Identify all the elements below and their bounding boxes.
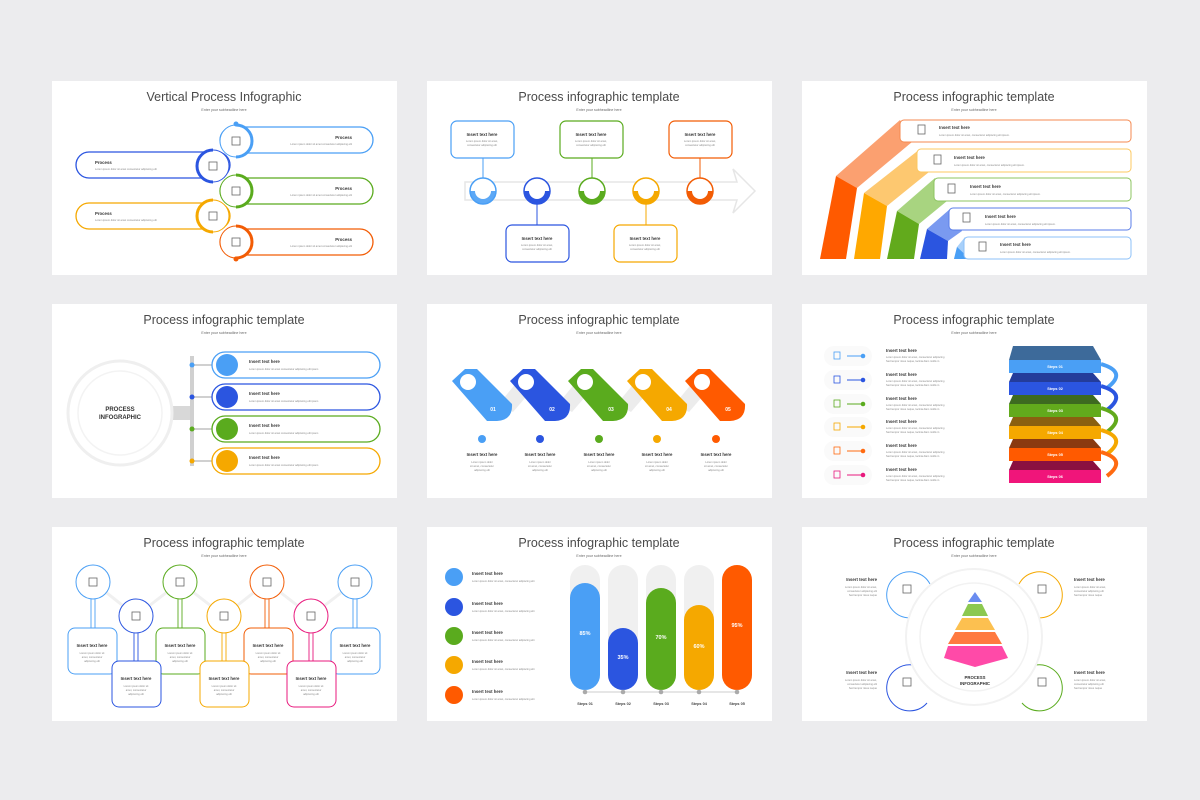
list text: Lorem ipsum dolor sit amet, consectetur adipiscing	[886, 403, 945, 407]
zigzag background	[93, 582, 355, 616]
bar chart: 95%	[731, 623, 743, 629]
center circle: PROCESS	[105, 407, 135, 413]
side texts: Insert text here	[846, 577, 878, 582]
box text: Insert text here	[165, 643, 196, 648]
step texts: adipiscing elit	[708, 468, 724, 472]
subtitle: Enter your subheadline here	[576, 554, 622, 558]
box text	[918, 125, 1071, 254]
step stack: Steps 03	[1047, 409, 1063, 413]
box text: Insert text here	[939, 125, 970, 130]
step texts: Lorem ipsum dolor	[471, 460, 493, 464]
title: Process infographic template	[143, 313, 305, 327]
panel: process tree	[52, 304, 397, 498]
list text: Insert text here	[886, 443, 917, 448]
box text: Lorem ipsum dolor sit amet,	[629, 243, 661, 247]
pyramid label	[960, 675, 990, 686]
step texts: Insert text here	[584, 452, 615, 457]
icon list: Insert text here	[472, 601, 503, 606]
box text: adipiscing elit	[260, 659, 276, 663]
box text: Lorem ipsum dolor sit amet,	[466, 139, 498, 143]
connectors	[483, 158, 700, 225]
list text: Sed tempor nisus neque, lacinia diam mollis in	[886, 359, 940, 363]
box text: Insert text here	[685, 132, 716, 137]
step texts: Lorem ipsum dolor	[529, 460, 551, 464]
center circle: INFOGRAPHIC	[99, 415, 142, 421]
box text: Lorem ipsum dolor sit	[80, 651, 105, 655]
bar chart	[570, 565, 752, 706]
side texts: consectetur adipiscing elit	[1074, 682, 1104, 686]
box text: amet, consectetur	[170, 655, 190, 659]
step texts: adipiscing elit	[532, 468, 548, 472]
box text: Insert text here	[296, 676, 327, 681]
center circle	[906, 569, 1042, 705]
box text: Lorem ipsum dolor sit	[168, 651, 193, 655]
side texts: consectetur adipiscing elit	[847, 682, 877, 686]
side texts: Lorem ipsum dolor sit amet,	[1074, 585, 1106, 589]
curved arrows	[1101, 364, 1116, 476]
step 1 right pill: Lorem ipsum dolor sit amet consectetur adipiscing elit	[290, 142, 352, 146]
box text: Lorem ipsum dolor sit	[212, 684, 237, 688]
step texts: Lorem ipsum dolor	[705, 460, 727, 464]
step text: Lorem ipsum dolor sit amet consectetur adipiscing elit ipsum	[249, 463, 318, 467]
bar chart: 60%	[693, 644, 705, 650]
box text: Insert text here	[340, 643, 371, 648]
box text: Lorem ipsum dolor sit amet,	[684, 139, 716, 143]
step texts: sit amet, consectetur	[645, 464, 669, 468]
step 3 right pill: Process	[335, 186, 353, 191]
box text: Insert text here	[253, 643, 284, 648]
step stack: Steps 04	[1047, 431, 1064, 435]
step texts: Lorem ipsum dolor	[646, 460, 668, 464]
step texts: Insert text here	[642, 452, 673, 457]
icon list: Lorem ipsum dolor sit amet, consectetur adipiscing elit	[472, 697, 535, 701]
box text: adipiscing elit	[172, 659, 188, 663]
icon list: Insert text here	[472, 659, 503, 664]
step texts: adipiscing elit	[591, 468, 607, 472]
tilted pills: 01	[490, 407, 496, 413]
step texts: sit amet, consectetur	[704, 464, 728, 468]
subtitle: Enter your subheadline here	[201, 331, 247, 335]
step 5 right pill: Process	[335, 237, 353, 242]
side texts: Sed tempor nisus neque	[1074, 593, 1103, 597]
box text: Lorem ipsum dolor sit	[124, 684, 149, 688]
subtitle: Enter your subheadline here	[951, 554, 997, 558]
list text: Insert text here	[886, 419, 917, 424]
icon list: Insert text here	[472, 630, 503, 635]
side texts: Insert text here	[846, 670, 878, 675]
list text: Sed tempor nisus neque, lacinia diam mollis in	[886, 430, 940, 434]
bar chart: Steps 03	[653, 702, 669, 706]
subtitle: Enter your subheadline here	[951, 108, 997, 112]
panel: process timeline arrow	[427, 81, 772, 275]
list text: Sed tempor nisus neque, lacinia diam mollis in	[886, 478, 940, 482]
boxes	[68, 628, 380, 707]
box text: Insert text here	[467, 132, 498, 137]
list text: Insert text here	[886, 348, 917, 353]
tilted pills: 05	[725, 407, 731, 413]
step stack: Steps 05	[1047, 453, 1063, 457]
step 3 right pill	[220, 178, 373, 204]
step text: Insert text here	[249, 423, 280, 428]
box text: amet, consectetur	[345, 655, 365, 659]
box text: Insert text here	[1000, 242, 1031, 247]
side texts: Insert text here	[1074, 670, 1105, 675]
step text	[249, 359, 318, 467]
side texts: Insert text here	[1074, 577, 1105, 582]
text boxes	[451, 121, 732, 262]
side texts: consectetur adipiscing elit	[1074, 589, 1104, 593]
tilted pills: 03	[608, 407, 614, 413]
subtitle: Enter your subheadline here	[576, 108, 622, 112]
step 2 left pill	[76, 152, 230, 178]
box text: Lorem ipsum dolor sit	[256, 651, 281, 655]
pyramid label: INFOGRAPHIC	[960, 681, 990, 686]
step texts: sit amet, consectetur	[528, 464, 552, 468]
side texts	[845, 577, 1106, 690]
step 2 left pill: Process	[95, 160, 112, 165]
box text: adipiscing elit	[128, 692, 144, 696]
box text: consectetur adipiscing elit	[522, 247, 552, 251]
box text: Lorem ipsum dolor sit amet,	[575, 139, 607, 143]
step stack	[1009, 346, 1101, 483]
step texts: Insert text here	[701, 452, 732, 457]
icon list: Insert text here	[472, 571, 503, 576]
subtitle: Enter your subheadline here	[951, 331, 997, 335]
list text	[886, 348, 945, 482]
side texts: Lorem ipsum dolor sit amet,	[1074, 678, 1106, 682]
box text: consectetur adipiscing elit	[467, 143, 497, 147]
list text: Insert text here	[886, 372, 917, 377]
box text	[77, 643, 371, 696]
box text: Lorem ipsum dolor sit	[343, 651, 368, 655]
panel: diagonal steps	[427, 304, 772, 498]
box text: Insert text here	[985, 214, 1016, 219]
side texts: Lorem ipsum dolor sit amet,	[845, 678, 877, 682]
box text: Lorem ipsum dolor sit amet,	[521, 243, 553, 247]
icon list	[445, 568, 535, 704]
step texts: Insert text here	[467, 452, 498, 457]
box text: Insert text here	[522, 236, 553, 241]
step 1 right pill: Process	[335, 135, 353, 140]
title: Process infographic template	[518, 90, 680, 104]
subtitle: Enter your subheadline here	[576, 331, 622, 335]
bar chart: 35%	[617, 655, 629, 661]
list text: Sed tempor nisus neque, lacinia diam mollis in	[886, 454, 940, 458]
step stack: Steps 02	[1047, 387, 1063, 391]
title: Process infographic template	[518, 313, 680, 327]
step text: Lorem ipsum dolor sit amet consectetur adipiscing elit ipsum	[249, 399, 318, 403]
icon list: Lorem ipsum dolor sit amet, consectetur adipiscing elit	[472, 579, 535, 583]
step text: Insert text here	[249, 455, 280, 460]
icon list	[824, 346, 872, 485]
box text: consectetur adipiscing elit	[576, 143, 606, 147]
box text: amet, consectetur	[258, 655, 278, 659]
box text: consectetur adipiscing elit	[630, 247, 660, 251]
connector	[170, 356, 212, 466]
box text: Lorem ipsum dolor sit amet, consectetur adipiscing elit ipsum.	[939, 133, 1010, 137]
title: Process infographic template	[893, 90, 1055, 104]
step texts: adipiscing elit	[649, 468, 665, 472]
circles	[76, 565, 372, 633]
step stack: Steps 01	[1047, 365, 1063, 369]
step icons	[216, 354, 238, 472]
bar chart: Steps 05	[729, 702, 745, 706]
panel: bar chart steps	[427, 527, 772, 721]
title: Process infographic template	[518, 536, 680, 550]
list text: Insert text here	[886, 396, 917, 401]
box text	[466, 132, 716, 251]
box text: Insert text here	[209, 676, 240, 681]
step texts: sit amet, consectetur	[587, 464, 611, 468]
box text: Insert text here	[954, 155, 985, 160]
step 4 left pill: Process	[95, 211, 112, 216]
list text: Lorem ipsum dolor sit amet, consectetur adipiscing	[886, 379, 945, 383]
step text: Insert text here	[249, 359, 280, 364]
step 3 right pill: Lorem ipsum dolor sit amet consectetur adipiscing elit	[290, 193, 352, 197]
tilted pills	[452, 369, 745, 421]
panel: circle and box chain	[52, 527, 397, 721]
step 4 left pill	[76, 203, 230, 229]
box text: Lorem ipsum dolor sit amet, consectetur adipiscing elit ipsum.	[985, 222, 1056, 226]
box text: Lorem ipsum dolor sit amet, consectetur adipiscing elit ipsum.	[970, 192, 1041, 196]
side texts: Sed tempor nisus neque	[849, 686, 878, 690]
box text: amet, consectetur	[126, 688, 146, 692]
title: Process infographic template	[893, 536, 1055, 550]
ribbons	[820, 120, 980, 259]
step 2 left pill: Lorem ipsum dolor sit amet consectetur adipiscing elit	[95, 167, 157, 171]
box text: Lorem ipsum dolor sit amet, consectetur adipiscing elit ipsum.	[954, 163, 1025, 167]
arrow band	[465, 169, 755, 213]
gray links	[499, 382, 708, 412]
title: Process infographic template	[893, 313, 1055, 327]
title: Vertical Process Infographic	[147, 90, 301, 104]
box text: consectetur adipiscing elit	[685, 143, 715, 147]
bar chart: 85%	[579, 631, 591, 637]
pyramid label: PROCESS	[964, 675, 986, 680]
box text: Insert text here	[630, 236, 661, 241]
center circle	[68, 361, 172, 465]
panel: stair ribbons	[802, 81, 1147, 275]
bar chart: Steps 04	[691, 702, 708, 706]
outer arcs	[887, 572, 1062, 711]
step 1 right pill	[220, 127, 373, 153]
step text: Lorem ipsum dolor sit amet consectetur adipiscing elit ipsum	[249, 431, 318, 435]
step text: Lorem ipsum dolor sit amet consectetur adipiscing elit ipsum	[249, 367, 318, 371]
box text: Insert text here	[77, 643, 108, 648]
step texts: sit amet, consectetur	[470, 464, 494, 468]
icon list: Lorem ipsum dolor sit amet, consectetur adipiscing elit	[472, 609, 535, 613]
box text: amet, consectetur	[82, 655, 102, 659]
bar chart: Steps 02	[615, 702, 631, 706]
list text: Lorem ipsum dolor sit amet, consectetur adipiscing	[886, 450, 945, 454]
list text: Insert text here	[886, 467, 917, 472]
step circles	[197, 122, 252, 262]
list text: Lorem ipsum dolor sit amet, consectetur adipiscing	[886, 426, 945, 430]
box text: Lorem ipsum dolor sit amet, consectetur adipiscing elit ipsum.	[1000, 250, 1071, 254]
bar chart: 70%	[655, 635, 667, 641]
subtitle: Enter your subheadline here	[201, 108, 247, 112]
list text: Sed tempor nisus neque, lacinia diam mollis in	[886, 383, 940, 387]
panel: vertical process	[52, 81, 397, 275]
side texts: consectetur adipiscing elit	[847, 589, 877, 593]
step texts: Insert text here	[525, 452, 556, 457]
step 5 right pill: Lorem ipsum dolor sit amet consectetur adipiscing elit	[290, 244, 352, 248]
title: Process infographic template	[143, 536, 305, 550]
box text: amet, consectetur	[301, 688, 321, 692]
step texts: adipiscing elit	[474, 468, 490, 472]
step text: Insert text here	[249, 391, 280, 396]
step texts	[467, 452, 732, 472]
tilted pills: 02	[549, 407, 555, 413]
pyramid	[944, 592, 1008, 667]
text boxes	[900, 120, 1131, 259]
step texts: Lorem ipsum dolor	[588, 460, 610, 464]
list text: Lorem ipsum dolor sit amet, consectetur adipiscing	[886, 355, 945, 359]
icons	[89, 578, 359, 620]
box text: amet, consectetur	[214, 688, 234, 692]
box text: Lorem ipsum dolor sit	[299, 684, 324, 688]
list text: Lorem ipsum dolor sit amet, consectetur adipiscing	[886, 474, 945, 478]
icon list: Lorem ipsum dolor sit amet, consectetur adipiscing elit	[472, 638, 535, 642]
subtitle: Enter your subheadline here	[201, 554, 247, 558]
bar chart: Steps 01	[577, 702, 593, 706]
dots	[478, 435, 720, 443]
side texts: Sed tempor nisus neque	[1074, 686, 1103, 690]
box text: Insert text here	[576, 132, 607, 137]
step stack: Steps 06	[1047, 475, 1063, 479]
box text: adipiscing elit	[84, 659, 100, 663]
tilted pills: 04	[666, 407, 672, 413]
icon list: Lorem ipsum dolor sit amet, consectetur adipiscing elit	[472, 667, 535, 671]
step circles	[470, 178, 713, 204]
box text: Insert text here	[121, 676, 152, 681]
box text: adipiscing elit	[303, 692, 319, 696]
box text: Insert text here	[970, 184, 1001, 189]
icon list: Insert text here	[472, 689, 503, 694]
list text: Sed tempor nisus neque, lacinia diam mollis in	[886, 407, 940, 411]
step 4 left pill: Lorem ipsum dolor sit amet consectetur adipiscing elit	[95, 218, 157, 222]
panel: stacked steps	[802, 304, 1147, 498]
box text: adipiscing elit	[216, 692, 232, 696]
side texts: Sed tempor nisus neque	[849, 593, 878, 597]
step 5 right pill	[220, 229, 373, 255]
step pills	[212, 352, 380, 474]
side texts: Lorem ipsum dolor sit amet,	[845, 585, 877, 589]
stems	[91, 599, 357, 661]
panel: pyramid	[802, 527, 1147, 721]
box text: adipiscing elit	[347, 659, 363, 663]
